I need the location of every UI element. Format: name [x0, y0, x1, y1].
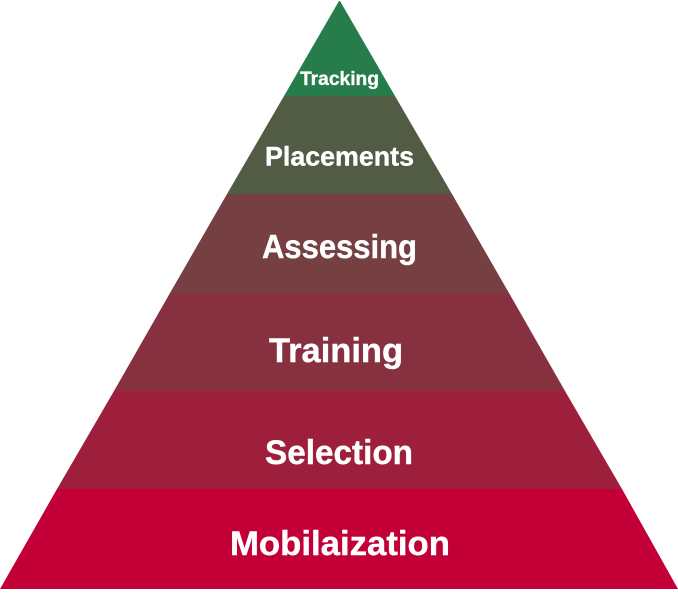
label: Assessing: Assessing: [262, 228, 417, 265]
label: Mobilaization: Mobilaization: [230, 525, 450, 563]
pyramid level: Mobilaization: [0, 489, 678, 589]
pyramid level: Selection: [57, 391, 622, 489]
label: Placements: Placements: [265, 142, 414, 172]
label: Tracking: Tracking: [300, 69, 379, 90]
pyramid level: Placements: [227, 96, 452, 194]
pyramid level: Assessing: [170, 194, 509, 293]
label: Training: Training: [269, 332, 403, 370]
label: Selection: Selection: [265, 434, 413, 472]
pyramid level: Training: [114, 293, 565, 391]
pyramid level: Tracking: [284, 1, 395, 96]
